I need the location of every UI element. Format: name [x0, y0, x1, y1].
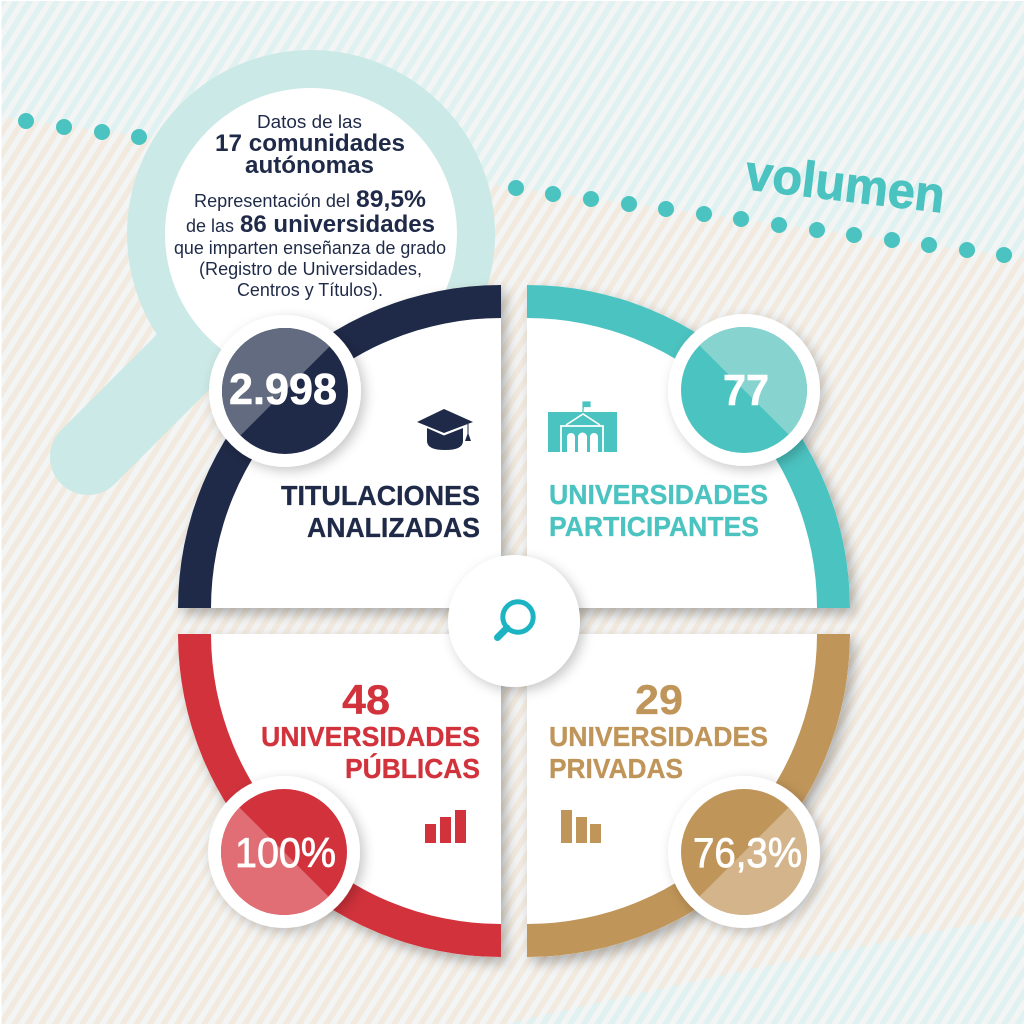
label: titulaciones analizadas: TITULACIONES: [281, 480, 480, 511]
icon: magnifier: [498, 602, 533, 638]
label: 48 universidades publicas: 48: [342, 676, 390, 723]
text block: magnifier data: 89,5%: [356, 186, 426, 213]
panel: titulaciones analizadas: [178, 285, 501, 608]
label: 29 universidades privadas: 29: [635, 676, 683, 723]
label: 29 universidades privadas: UNIVERSIDADES: [549, 721, 768, 752]
label: 29 universidades privadas: PRIVADAS: [549, 753, 683, 784]
text block: magnifier data: Centros y Títulos).: [237, 280, 383, 300]
badge: 100%: [208, 776, 360, 928]
label: 29 universidades privadas: [549, 676, 768, 784]
badge: 100%: 100%: [235, 829, 336, 876]
badge: 77: 77: [723, 366, 769, 415]
arc: red: [178, 634, 501, 957]
text block: magnifier data: (Registro de Universidades,: [199, 259, 422, 279]
dotted line right: [508, 180, 1012, 263]
arc: navy: [178, 285, 501, 608]
label: 48 universidades publicas: [261, 676, 480, 784]
label: 48 universidades publicas: PÚBLICAS: [345, 753, 480, 784]
badge: 2.998: 2.998: [229, 365, 337, 414]
label: universidades participantes: PARTICIPANTES: [549, 511, 759, 542]
label: titulaciones analizadas: [281, 480, 480, 543]
arc: tan: [527, 634, 850, 957]
text block: magnifier data: 86 universidades: [240, 211, 435, 238]
icon: graduation cap: [417, 409, 473, 450]
icon: university building: [548, 402, 617, 452]
badge: 76,3%: 76,3%: [693, 829, 802, 876]
text block: magnifier data: de las: [186, 216, 234, 236]
label: universidades participantes: [549, 479, 768, 542]
text block: magnifier data: autónomas: [245, 152, 374, 179]
icon: falling bars: [561, 810, 601, 843]
label: universidades participantes: UNIVERSIDADES: [549, 479, 768, 510]
badge: 2.998: [209, 315, 361, 467]
panel: universidades publicas: [178, 634, 501, 957]
label: titulaciones analizadas: ANALIZADAS: [307, 512, 480, 543]
text block: magnifier data: [174, 112, 446, 300]
text block: magnifier data: Representación del: [194, 191, 350, 211]
icon: rising bars: [425, 810, 466, 843]
text block: magnifier data: 17 comunidades: [215, 130, 405, 157]
text block: magnifier data: Datos de las: [257, 112, 362, 132]
badge: 76,3%: [668, 776, 820, 928]
heading: volumen: volumen: [743, 144, 948, 224]
magnifying glass: [88, 69, 476, 457]
panel: universidades participantes: [527, 285, 850, 608]
center circle with magnifier icon: [448, 555, 580, 687]
arc: teal: [527, 285, 850, 608]
panel: universidades privadas: [527, 634, 850, 957]
text block: magnifier data: que imparten enseñanza de grado: [174, 238, 446, 258]
badge: 77: [668, 314, 820, 466]
dotted line left: [18, 113, 147, 145]
label: 48 universidades publicas: UNIVERSIDADES: [261, 721, 480, 752]
